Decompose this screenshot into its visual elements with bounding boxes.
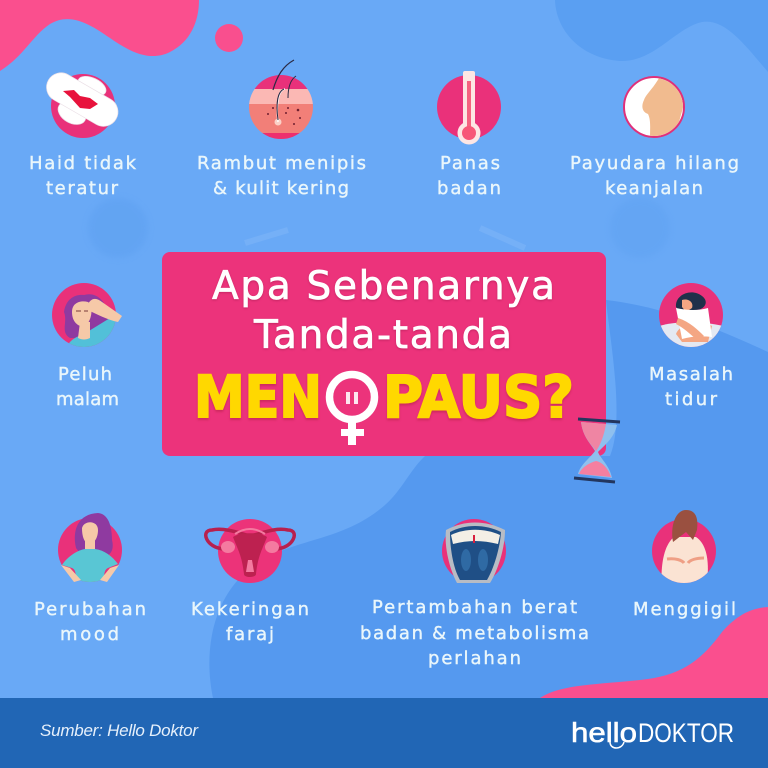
label: Rambut menipis & kulit kering: Rambut menipis — [197, 153, 366, 174]
label: Kekeringan faraj — [191, 599, 309, 645]
icon: hair and skin cross-section — [249, 60, 313, 139]
footer bar — [0, 698, 768, 768]
icon: woman hugging pillow — [659, 283, 724, 350]
label: Panas badan: Panas — [440, 153, 500, 174]
label: Haid tidak teratur: Haid tidak — [29, 153, 137, 174]
label: Masalah tidur — [649, 364, 733, 410]
decorative pink circle — [215, 24, 243, 52]
heading line 1: Apa Sebenarnya — [212, 264, 555, 309]
logo: helloDOKTOR: hello — [571, 717, 637, 748]
label: Payudara hilang keanjalan — [570, 153, 739, 199]
label: Pertambahan berat badan & metabolisma perlahan: badan & metabolisma — [360, 623, 589, 644]
label: Haid tidak teratur: teratur — [46, 178, 119, 199]
icon: hourglass — [574, 419, 620, 482]
label: Perubahan mood — [34, 599, 146, 645]
label: Masalah tidur: Masalah — [649, 364, 733, 385]
decorative pink blob top-left — [0, 0, 199, 71]
icon: woman sweating — [52, 283, 122, 352]
icon: uterus — [206, 519, 294, 583]
icon: woman with hands on hips — [58, 513, 122, 584]
icon: sanitary pad — [41, 68, 123, 138]
label: Kekeringan faraj: Kekeringan — [191, 599, 309, 620]
icon: thermometer — [437, 71, 501, 144]
label: Kekeringan faraj: faraj — [226, 624, 274, 645]
heading line 2: Tanda-tanda — [253, 313, 512, 358]
label: Peluh malam — [56, 364, 119, 410]
label: Peluh malam: Peluh — [58, 364, 112, 385]
label: Rambut menipis & kulit kering: & kulit kering — [213, 178, 349, 199]
label: Haid tidak teratur — [29, 153, 137, 199]
label: Rambut menipis & kulit kering — [197, 153, 366, 199]
label: Payudara hilang keanjalan: keanjalan — [605, 178, 703, 199]
label: Payudara hilang keanjalan: Payudara hilang — [570, 153, 739, 174]
icon: breast — [624, 76, 684, 138]
decorative pink blob bottom-right — [540, 607, 768, 698]
icon: female symbol as letter O — [330, 374, 374, 445]
logo: helloDOKTOR: DOKTOR — [638, 718, 734, 748]
label: Masalah tidur: tidur — [665, 389, 718, 410]
label: Panas badan: badan — [437, 178, 501, 199]
source credit: Sumber: Hello Doktor — [40, 721, 199, 740]
label: Pertambahan berat badan & metabolisma perlahan — [360, 597, 589, 669]
label: Peluh malam: malam — [56, 389, 119, 410]
heading keyword PAUS: PAUS? — [383, 363, 574, 431]
icon: weighing scale — [442, 519, 506, 583]
panel: central title — [162, 252, 606, 456]
label: Pertambahan berat badan & metabolisma perlahan: perlahan — [428, 648, 521, 669]
label: Panas badan — [437, 153, 501, 199]
logo: helloDOKTOR — [571, 717, 734, 748]
icon: woman shivering — [652, 510, 716, 590]
label: Menggigil: Menggigil — [633, 599, 736, 620]
label: Pertambahan berat badan & metabolisma perlahan: Pertambahan berat — [372, 597, 577, 618]
label: Perubahan mood: mood — [60, 624, 119, 645]
heading keyword MEN: MEN — [194, 363, 322, 431]
label: Perubahan mood: Perubahan — [34, 599, 146, 620]
